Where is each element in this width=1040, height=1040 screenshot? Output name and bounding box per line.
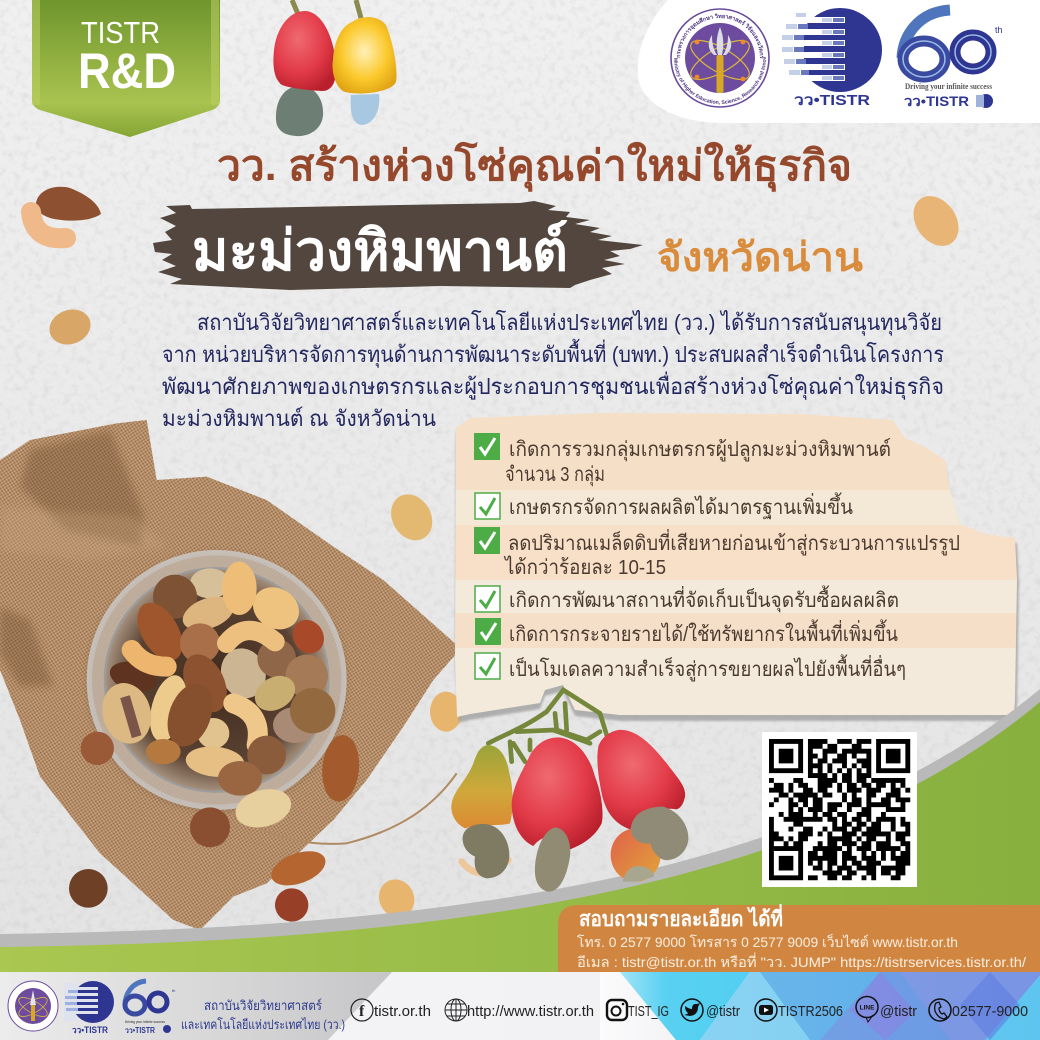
footer logos xyxy=(8,981,175,1035)
line xyxy=(856,996,917,1022)
checkbox: solid 1 xyxy=(474,433,500,460)
TISTR R&D green ribbon: R&D xyxy=(78,43,176,99)
checkbox: solid 3 xyxy=(474,527,500,554)
right nut xyxy=(631,807,688,860)
footer seal xyxy=(8,981,58,1031)
subtitle brush banner: มะม่วงหิมพานต์ xyxy=(192,219,568,282)
footer organisation name: และเทคโนโลยีแห่งประเทศไทย (วว.) xyxy=(181,1017,345,1032)
title: วว. สร้างห่วงโซ่คุณค่าใหม่ให้ธุรกิจ xyxy=(217,141,852,192)
logo: 60th anniversary: วว•TISTR xyxy=(904,93,969,109)
intro paragraph: มะม่วงหิมพานต์ ณ จังหวัดน่าน xyxy=(162,406,436,431)
footer organisation name xyxy=(181,998,345,1032)
stems xyxy=(488,690,607,762)
line: @tistr xyxy=(880,1003,917,1020)
bottom contact strip xyxy=(0,972,1040,1040)
website: http://www.tistr.or.th xyxy=(467,1003,594,1020)
footer TISTR globe: วว•TISTR xyxy=(72,1025,108,1035)
TISTR R&D green ribbon xyxy=(32,0,220,137)
checklist item 1: เกิดการรวมกลุ่มเกษตรกรผู้ปลูกมะม่วงหิมพานต์ xyxy=(509,438,891,462)
QR code xyxy=(762,732,917,887)
phone: 02577-9000 xyxy=(952,1003,1028,1020)
intro paragraph: จาก หน่วยบริหารจัดการทุนด้านการพัฒนาระดับพื้นที่ (บพท.) ประสบผลสำเร็จดำเนินโครงการ xyxy=(162,339,944,368)
cashew apple bunch photo xyxy=(451,690,688,892)
checklist item 3: ลดปริมาณเมล็ดดิบที่เสียหายก่อนเข้าสู่กระบวนการแปรรูป xyxy=(508,529,960,556)
middle nut xyxy=(535,827,570,892)
TISTR R&D green ribbon: TISTR xyxy=(81,15,160,50)
line: LINE xyxy=(860,1004,875,1012)
checklist item 5: เกิดการกระจายรายได้/ใช้ทรัพยากรในพื้นที่เพิ่มขึ้น xyxy=(509,619,898,646)
footer organisation name: สถาบันวิจัยวิทยาศาสตร์ xyxy=(204,998,322,1013)
footer 60th logo: th xyxy=(172,988,175,993)
top cashew apples photo xyxy=(273,0,397,136)
intro paragraph: สถาบันวิจัยวิทยาศาสตร์และเทคโนโลยีแห่งประเทศไทย (วว.) ได้รับการสนับสนุนทุนวิจัย xyxy=(197,310,942,336)
contact info orange box: สอบถามรายละเอียด ได้ที่ xyxy=(579,903,783,931)
small back fruit xyxy=(611,828,661,882)
youtube: TISTR2506 xyxy=(778,1003,843,1020)
logo: 60th anniversary: th xyxy=(995,25,1003,35)
logo: ministry seal xyxy=(670,8,770,108)
checklist item 1: จำนวน 3 กลุ่ม xyxy=(505,463,605,487)
burlap cloth xyxy=(0,420,457,930)
website xyxy=(445,999,594,1021)
checklist item 1 xyxy=(505,438,891,487)
red fruit right xyxy=(597,730,685,829)
checkbox: outline 6 xyxy=(475,653,500,679)
checklist item 2: เกษตรกรจัดการผลผลิตได้มาตรฐานเพิ่มขึ้น xyxy=(509,492,853,519)
logo: 60th anniversary xyxy=(902,10,1003,109)
footer 60th logo: วว•TISTR xyxy=(125,1026,155,1035)
nut: pistachio xyxy=(44,304,96,350)
facebook xyxy=(351,999,431,1021)
checklist item 4: เกิดการพัฒนาสถานที่จัดเก็บเป็นจุดรับซื้อผลผลิต xyxy=(509,585,899,613)
facebook: f xyxy=(359,1003,365,1020)
glass bowl xyxy=(88,553,345,810)
red fruit middle xyxy=(512,737,603,849)
checklist item 6: เป็นโมเดลความสำเร็จสู่การขยายผลไปยังพื้นที่อื่นๆ xyxy=(509,654,906,682)
logo: 60th anniversary: Driving your infinite success xyxy=(905,82,993,91)
contact info orange box: อีเมล : tistr@tistr.or.th หรือที่ "วว. JUMP" https://tistrservices.tistr.or.th/ xyxy=(577,953,1026,970)
checklist item 3: ได้กว่าร้อยละ 10-15 xyxy=(503,555,666,579)
phone xyxy=(929,999,1028,1021)
subtitle brush banner xyxy=(153,201,643,290)
footer 60th logo: Driving your infinite success xyxy=(125,1019,166,1024)
twitter: @tistr xyxy=(706,1003,740,1020)
checkbox: outline 4 xyxy=(475,586,500,612)
province label: จังหวัดน่าน xyxy=(657,236,863,280)
checkbox: solid 5 xyxy=(475,618,501,645)
intro paragraph xyxy=(162,310,944,431)
yellow fruit nut xyxy=(463,824,509,878)
social links xyxy=(351,996,1028,1022)
header logos xyxy=(670,4,1003,109)
burlap sack with bowl of nuts photo xyxy=(0,420,462,930)
decorative blue geometric pattern xyxy=(600,972,1040,1040)
nuts in bowl xyxy=(96,562,335,796)
checkbox: outline 2 xyxy=(475,493,500,519)
facebook: tistr.or.th xyxy=(374,1003,431,1020)
footer 60th logo xyxy=(125,981,175,1035)
twitter xyxy=(681,999,740,1021)
intro paragraph: พัฒนาศักยภาพของเกษตรกรและผู้ประกอบการชุมชนเพื่อสร้างห่วงโซ่คุณค่าใหม่ธุรกิจ xyxy=(162,371,944,400)
green curved footer band xyxy=(0,689,1040,975)
yellow fruit xyxy=(451,745,513,828)
logo: TISTR globe xyxy=(778,5,882,109)
contact info orange box: โทร. 0 2577 9000 โทรสาร 0 2577 9009 เว็บไซต์ www.tistr.or.th xyxy=(577,933,958,950)
youtube xyxy=(755,999,843,1021)
nut: peanut top right xyxy=(904,187,968,255)
checklist torn paper panel xyxy=(450,410,1020,723)
checklist item 3 xyxy=(503,529,960,579)
back cashew xyxy=(462,860,508,873)
instagram: TIST_IG xyxy=(628,1003,669,1020)
footer TISTR globe xyxy=(64,981,114,1035)
nut: almond xyxy=(36,187,101,221)
nuts beside bowl and on sack xyxy=(69,487,462,928)
instagram xyxy=(607,1000,669,1020)
contact info orange box xyxy=(558,903,1040,972)
top right white logo panel xyxy=(638,0,1040,123)
nut: cashew xyxy=(31,212,66,238)
logo: TISTR globe: วว•TISTR xyxy=(794,92,870,109)
scattered nuts upper xyxy=(31,187,968,350)
